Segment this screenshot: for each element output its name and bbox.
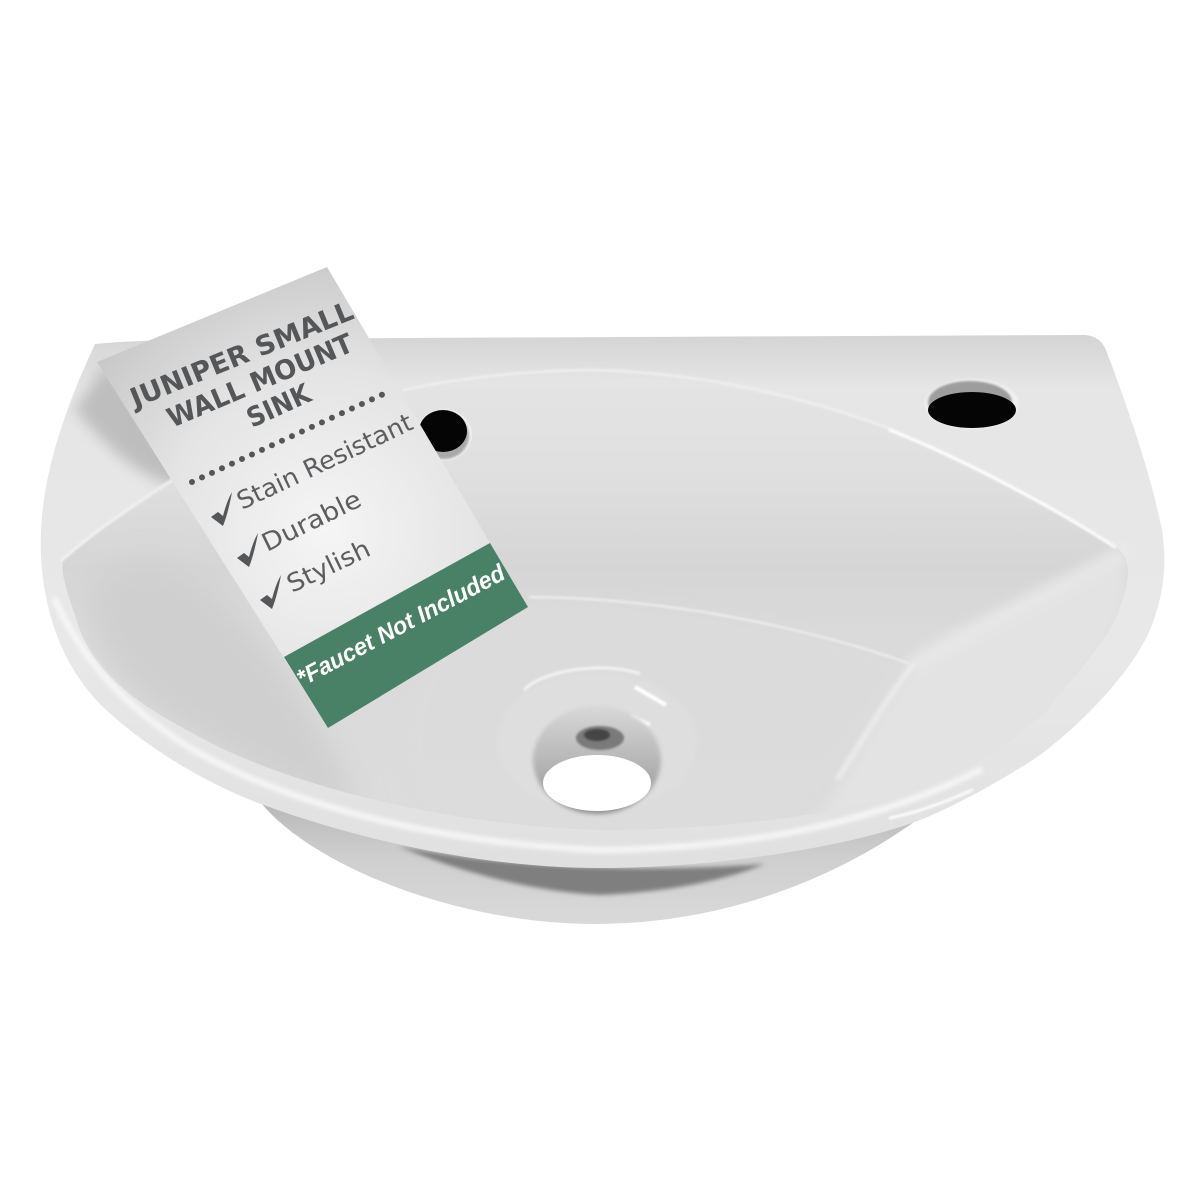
drain — [497, 668, 697, 814]
deck shading — [72, 367, 171, 486]
card title: WALL MOUNT — [163, 328, 358, 434]
card title: SINK — [242, 378, 317, 434]
feature: stylish: Stylish — [282, 534, 375, 598]
drain opening — [543, 755, 651, 811]
drain throat — [533, 706, 661, 814]
sink illustration — [40, 335, 1164, 924]
left faucet hole — [416, 409, 472, 461]
drain dish — [497, 672, 697, 812]
banner text: *Faucet Not Included — [292, 559, 511, 692]
basin surfaces — [62, 480, 1128, 812]
sink rim and deck — [41, 335, 1164, 868]
card title: JUNIPER SMALL — [124, 296, 358, 415]
product card — [97, 267, 528, 728]
sloped right panel — [882, 564, 1127, 732]
infographic canvas — [40, 267, 1164, 924]
card background — [97, 267, 528, 728]
sink underbody — [255, 795, 930, 924]
feature: durable: Durable — [257, 484, 366, 557]
right faucet hole — [925, 379, 1019, 429]
green banner background — [284, 543, 528, 728]
feature list — [211, 407, 417, 609]
feature: stylish — [260, 534, 375, 609]
overflow hole — [576, 726, 624, 750]
lower bowl — [407, 597, 908, 827]
feature: stain resistant: Stain Resistant — [232, 407, 417, 515]
left panel shade — [102, 595, 340, 790]
basin fill — [62, 480, 1120, 776]
basin highlights — [55, 370, 1125, 850]
left shelf shadow — [72, 367, 171, 486]
feature: durable — [237, 484, 366, 567]
dotted divider — [192, 392, 388, 482]
